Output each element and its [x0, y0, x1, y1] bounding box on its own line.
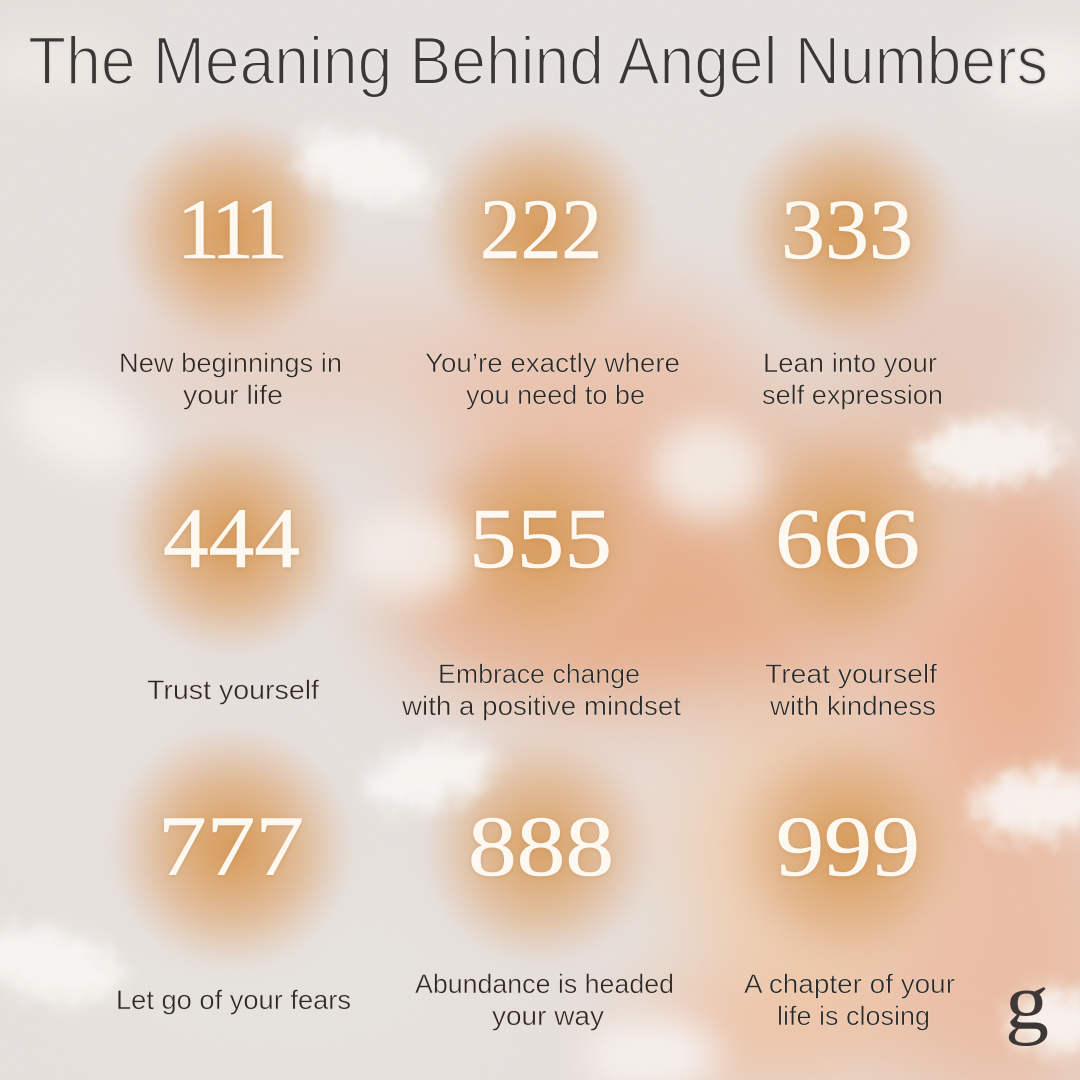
description 999: life is closing: [777, 1001, 930, 1031]
number 999: 999: [776, 798, 920, 894]
description 555: with a positive mindset: [401, 691, 682, 721]
number 444: 444: [163, 490, 300, 586]
item: 333: [762, 181, 943, 410]
item: 666: [765, 490, 938, 721]
description 555: [401, 659, 682, 721]
description 222: [425, 348, 680, 410]
number 111: 111: [177, 181, 288, 277]
item: 999: [744, 798, 955, 1031]
number 666: 666: [775, 490, 920, 586]
description 333: [762, 348, 943, 410]
item: 444: [147, 490, 320, 705]
number 555: 555: [469, 490, 612, 586]
number halos: [108, 114, 976, 976]
description 777: Let go of your fears: [116, 985, 351, 1015]
description 111: your life: [183, 380, 283, 410]
description 333: self expression: [762, 380, 943, 410]
description 111: New beginnings in: [119, 348, 342, 378]
item: 777: [116, 798, 351, 1015]
description 888: Abundance is headed: [415, 969, 674, 999]
description 111: [119, 348, 342, 410]
description 222: you need to be: [466, 380, 645, 410]
description 999: A chapter of your: [744, 969, 955, 999]
item: 555: [401, 490, 682, 721]
description 888: your way: [492, 1001, 605, 1031]
description 555: Embrace change: [438, 659, 640, 689]
item: 222: [425, 181, 680, 410]
description 444: Trust yourself: [147, 675, 320, 705]
number 888: 888: [468, 798, 614, 894]
item: 111: [119, 181, 342, 410]
description 666: [765, 659, 938, 721]
description 888: [415, 969, 674, 1031]
description 666: Treat yourself: [765, 659, 938, 689]
item: 888: [415, 798, 674, 1031]
number 777: 777: [158, 798, 304, 894]
description 999: [744, 969, 955, 1031]
description 666: with kindness: [769, 691, 936, 721]
description 333: Lean into your: [763, 348, 937, 378]
number 333: 333: [781, 181, 913, 277]
description 222: You’re exactly where: [425, 348, 680, 378]
logo: g: g: [1005, 959, 1049, 1047]
number 222: 222: [480, 181, 602, 277]
